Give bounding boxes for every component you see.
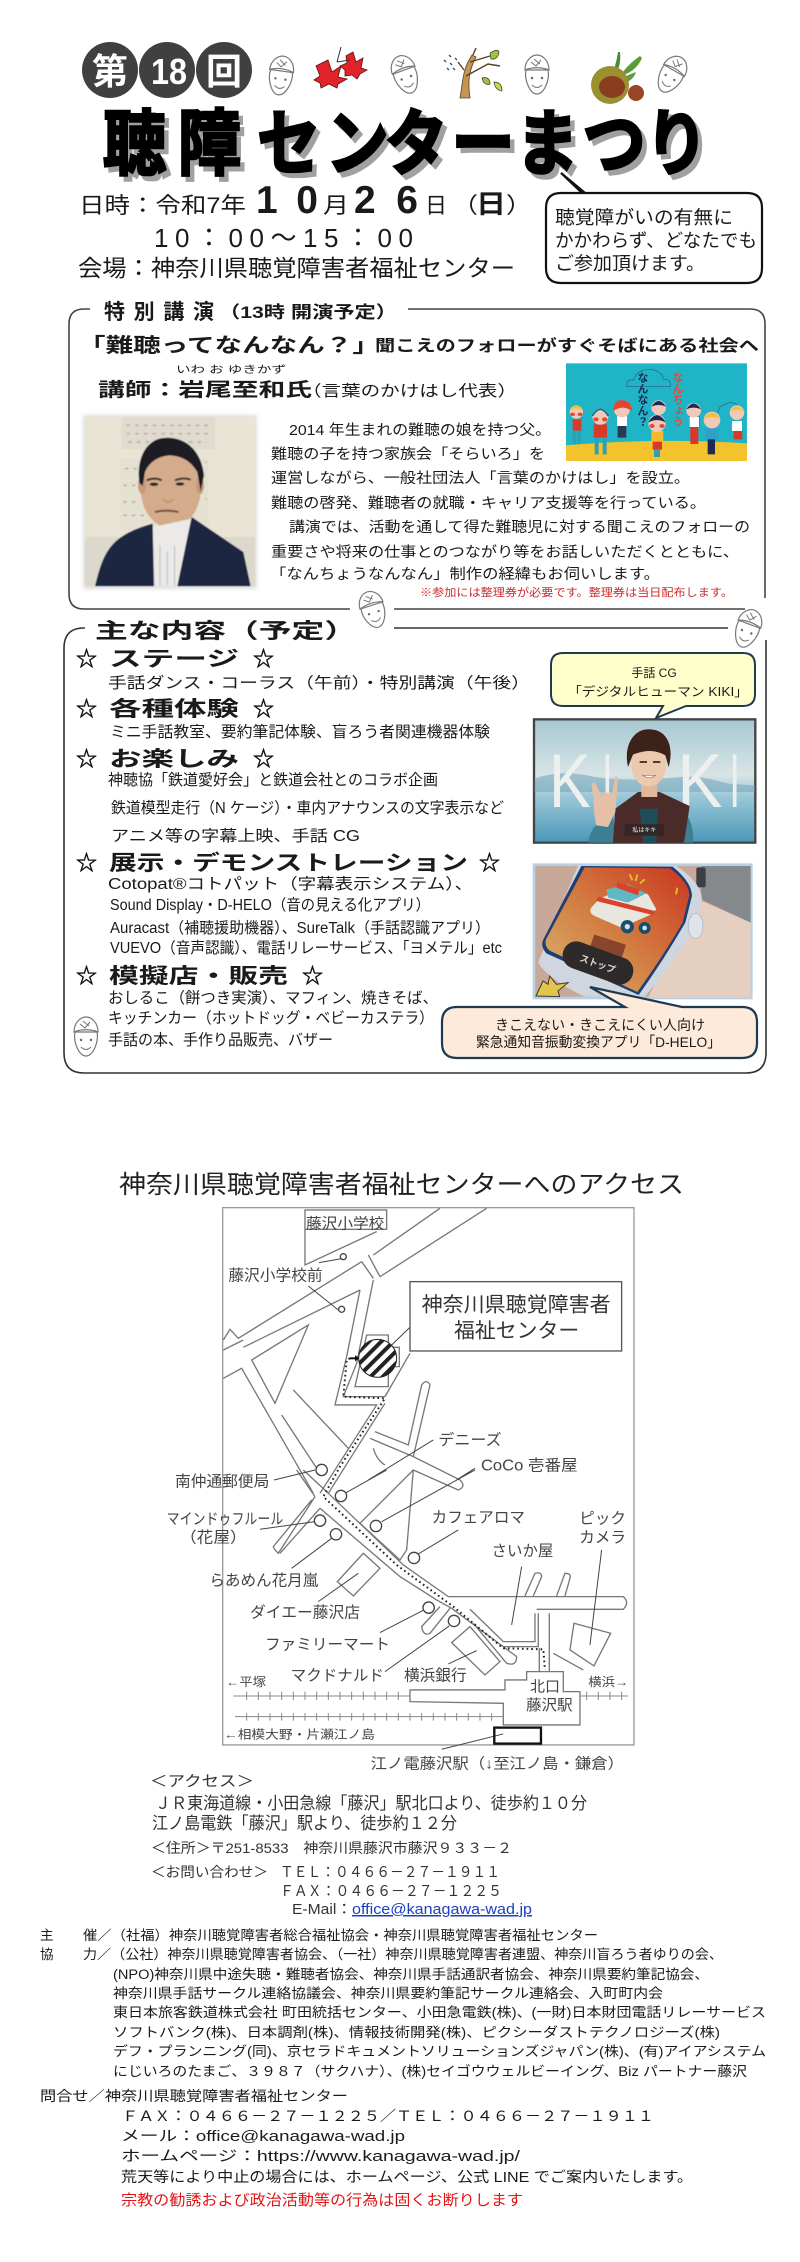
map labels: デニーズ bbox=[438, 1431, 502, 1449]
badge: 第18回: 第 bbox=[92, 51, 128, 92]
organizers and supporters: 神奈川県手話サークル連絡協議会、神奈川県要約筆記サークル連絡会、入町町内会 bbox=[113, 1985, 664, 2001]
label box: center: 神奈川県聴覚障害者 bbox=[422, 1294, 611, 1317]
icon: acorn face 3 bbox=[525, 55, 549, 94]
lecture description: 「なんちょうなんなん」制作の経緯もお伺いします。 bbox=[270, 566, 660, 583]
access information: ＴＥＬ：０４６６－２７－１９１１ bbox=[280, 1864, 500, 1881]
map labels: ファミリーマート bbox=[265, 1636, 390, 1653]
badge: 第18回 bbox=[82, 42, 252, 98]
section: food stalls and sales: 手話の本、手作り品販売、バザー bbox=[108, 1031, 333, 1049]
map labels: ←相模大野・片瀬江ノ島 bbox=[224, 1727, 375, 1742]
event date and venue: 26 bbox=[354, 179, 418, 222]
map labels: 横浜→ bbox=[588, 1675, 628, 1689]
contact information: ＦＡＸ：０４６６－２７－１２２５／ＴＥＬ：０４６６－２７－１９１１ bbox=[122, 2108, 654, 2125]
organizers and supporters: 催／（社福）神奈川聴覚障害者総合福祉協会・神奈川県聴覚障害者福祉センター bbox=[83, 1928, 598, 1943]
contact information: ホームページ：https://www.kanagawa-wad.jp/ bbox=[121, 2149, 521, 2165]
event date and venue: 会場：神奈川県聴覚障害者福祉センター bbox=[78, 255, 515, 281]
event date and venue bbox=[78, 179, 532, 281]
section: fun activities: ☆ bbox=[76, 748, 97, 771]
map labels: マインドゥフルール bbox=[167, 1511, 283, 1528]
icon: acorn face at panel corner bbox=[730, 606, 766, 651]
callout: sign language CG: 「デジタルヒューマン KIKI」 bbox=[568, 684, 748, 699]
section: exhibits and demonstrations: Sound Display・D-HELO（音の見える化アプリ） bbox=[110, 896, 430, 914]
map labels: （花屋） bbox=[180, 1530, 247, 1547]
heading: access: 神奈川県聴覚障害者福祉センターへのアクセス bbox=[119, 1171, 684, 1199]
access information: ＦＡＸ：０４６６－２７－１２２５ bbox=[280, 1883, 502, 1900]
organizers and supporters: 協 bbox=[40, 1947, 54, 1962]
map labels: 藤沢小学校 bbox=[306, 1215, 384, 1232]
organizers and supporters: デフ・プランニング(同)、京セラドキュメントソリューションズジャパン(株)、(有)アイアシステム bbox=[113, 2043, 766, 2059]
label box: center bbox=[410, 1282, 622, 1351]
map labels: 横浜銀行 bbox=[404, 1668, 467, 1685]
notice: no religious or political activity: 宗教の勧誘および政治活動等の行為は固くお断りします bbox=[121, 2191, 523, 2209]
section: food stalls and sales bbox=[76, 965, 438, 1049]
photo: lecturer portrait bbox=[83, 415, 257, 589]
lecture description: 難聴の子を持つ家族会「そらいろ」を bbox=[271, 446, 545, 463]
notice: ticket required: ※参加には整理券が必要です。整理券は当日配布します。 bbox=[420, 585, 733, 599]
event date and venue: （ bbox=[452, 193, 478, 218]
map buildings bbox=[305, 1210, 611, 1725]
lecture time: （13時 開演予定） bbox=[219, 303, 397, 322]
organizers and supporters: にじいろのたまご、３９８７（サクハナ）、(株)セイゴウウェルビーイング、Biz パートナー藤沢 bbox=[113, 2063, 748, 2079]
organizers and supporters: ソフトバンク(株)、日本調剤(株)、情報技術開発(株)、ピクシーダストテクノロジーズ(株) bbox=[113, 2025, 720, 2040]
section: exhibits and demonstrations: VUEVO（音声認識）、電話リレーサービス、「ヨメテル」etc bbox=[110, 939, 502, 957]
access information: 江ノ島電鉄「藤沢」駅より、徒歩約１２分 bbox=[152, 1814, 457, 1833]
section: food stalls and sales: ☆ bbox=[302, 965, 323, 988]
section: exhibits and demonstrations: Auracast（補聴援助機器）、SureTalk（手話認識アプリ） bbox=[110, 919, 490, 937]
image: digital human KIKI bbox=[534, 719, 755, 843]
callout: everyone welcome: 聴覚障がいの有無に bbox=[555, 207, 733, 228]
heading: main contents: 主な内容（予定） bbox=[95, 620, 357, 643]
organizers and supporters bbox=[40, 1928, 766, 2079]
panel border bbox=[64, 628, 766, 1073]
callout: sign language CG: 手話 CG bbox=[631, 666, 677, 680]
badge: 第18回: 18 bbox=[151, 51, 187, 92]
map labels: 江ノ電藤沢駅（↓至江ノ島・鎌倉） bbox=[371, 1755, 624, 1772]
section: exhibits and demonstrations: 展示・デモンストレーション bbox=[109, 851, 468, 875]
section: exhibits and demonstrations: ☆ bbox=[479, 852, 500, 875]
lecture description: 2014 年生まれの難聴の娘を持つ父。 bbox=[289, 422, 551, 439]
map labels: カメラ bbox=[579, 1530, 626, 1547]
map labels: 北口 bbox=[530, 1679, 560, 1696]
event date and venue: 日 bbox=[476, 189, 506, 219]
ruby reading: いわ お ゆきかず bbox=[176, 364, 286, 376]
lecture title: 「難聴ってなんなん？」 bbox=[78, 334, 380, 357]
section: food stalls and sales: 模擬店・販売 bbox=[109, 965, 288, 988]
image: D-HELO watch app bbox=[534, 865, 751, 998]
map labels: 南仲通郵便局 bbox=[175, 1474, 269, 1491]
event date and venue: ） bbox=[506, 193, 532, 218]
section: hands-on experience: ☆ bbox=[253, 698, 274, 721]
section: exhibits and demonstrations bbox=[76, 851, 502, 957]
organizers and supporters: 東日本旅客鉄道株式会社 町田統括センター、小田急電鉄(株)、(一財)日本財団電話リレーサービス bbox=[113, 2004, 766, 2020]
access information: office@kanagawa-wad.jp bbox=[352, 1901, 532, 1918]
section: fun activities bbox=[76, 748, 504, 845]
map labels: 藤沢小学校前 bbox=[228, 1268, 323, 1285]
section: hands-on experience: 各種体験 bbox=[109, 697, 239, 721]
icon: autumn tree bbox=[444, 48, 502, 98]
callout: everyone welcome: かかわらず、どなたでも bbox=[555, 230, 757, 251]
rail tracks bbox=[233, 1692, 628, 1721]
section: exhibits and demonstrations: Cotopat®コトパット（字幕表示システム）、 bbox=[108, 875, 473, 893]
title: 聴障センターまつり bbox=[103, 105, 708, 185]
section: hands-on experience: ☆ bbox=[76, 698, 97, 721]
organizers and supporters: 主 bbox=[40, 1928, 54, 1943]
section: hands-on experience: ミニ手話教室、要約筆記体験、盲ろう者関連機器体験 bbox=[110, 723, 490, 741]
access information: ＪＲ東海道線・小田急線「藤沢」駅北口より、徒歩約１０分 bbox=[155, 1794, 587, 1813]
section: fun activities: 神聴協「鉄道愛好会」と鉄道会社とのコラボ企画 bbox=[108, 771, 438, 789]
map labels: 藤沢駅 bbox=[526, 1697, 573, 1714]
lecture description bbox=[270, 422, 750, 583]
image: digital human KIKI: 私はキキ bbox=[632, 826, 656, 834]
image: digital human KIKI: I bbox=[602, 739, 613, 824]
callout: D-HELO app: きこえない・きこえにくい人向け bbox=[495, 1017, 705, 1033]
panel: special lecture bbox=[69, 301, 765, 609]
map labels: らあめん花月嵐 bbox=[209, 1573, 319, 1590]
icon: acorn face between panels bbox=[356, 588, 390, 631]
contact information: 荒天等により中止の場合には、ホームページ、公式 LINE でご案内いたします。 bbox=[121, 2168, 693, 2186]
section: fun activities: ☆ bbox=[253, 748, 274, 771]
section: food stalls and sales: おしるこ（餅つき実演）、マフィン、焼きそば、 bbox=[108, 989, 438, 1007]
access information: E-Mail： bbox=[292, 1901, 352, 1918]
heading: special lecture: 特別講演 bbox=[104, 301, 214, 324]
leader lines and markers bbox=[260, 1254, 602, 1749]
map labels: さいか屋 bbox=[492, 1543, 553, 1560]
section: fun activities: 鉄道模型走行（N ケージ）・車内アナウンスの文字表示など bbox=[111, 799, 504, 817]
icon: chestnut with leaves bbox=[591, 52, 644, 104]
event date and venue: 10 bbox=[256, 179, 318, 222]
illustration: children running: なんちょう bbox=[671, 372, 683, 427]
map frame bbox=[223, 1208, 634, 1745]
image: digital human KIKI: K bbox=[677, 739, 722, 824]
icon: acorn face 1 bbox=[266, 55, 296, 96]
access information: ＜アクセス＞ bbox=[150, 1773, 254, 1790]
map labels: ←平塚 bbox=[226, 1675, 266, 1689]
map labels: マクドナルド bbox=[291, 1668, 384, 1685]
callout: sign language CG bbox=[551, 653, 755, 718]
marker: center location bbox=[359, 1339, 397, 1377]
section: stage: 手話ダンス・コーラス（午前）・特別講演（午後） bbox=[108, 674, 530, 692]
section: fun activities: アニメ等の字幕上映、手話 CG bbox=[111, 827, 360, 845]
map labels: ピック bbox=[579, 1510, 626, 1527]
map labels bbox=[167, 1215, 628, 1772]
walking route bbox=[323, 1358, 545, 1670]
callout: everyone welcome bbox=[546, 173, 762, 283]
image: D-HELO watch app: ストップ bbox=[578, 953, 617, 976]
event date and venue: 日時：令和7年 bbox=[79, 193, 246, 218]
illustration: children running bbox=[566, 363, 747, 461]
event date and venue: 月 bbox=[323, 193, 349, 218]
section: stage: ☆ bbox=[76, 648, 97, 671]
event date and venue: 日 bbox=[425, 193, 447, 218]
callout: D-HELO app: 緊急通知音振動変換アプリ「D-HELO」 bbox=[476, 1034, 721, 1050]
title: 聴障センターまつり bbox=[107, 110, 713, 190]
contact information: 問合せ／神奈川県聴覚障害者福祉センター bbox=[40, 2088, 348, 2104]
access information bbox=[150, 1773, 587, 1918]
badge: 第18回: 回 bbox=[206, 51, 242, 92]
contact information bbox=[40, 2088, 693, 2186]
access information: ＜住所＞〒251-8533 神奈川県藤沢市藤沢９３３－２ bbox=[151, 1840, 512, 1856]
section: food stalls and sales: キッチンカー（ホットドッグ・ベビーカステラ） bbox=[108, 1009, 434, 1027]
callout: everyone welcome: ご参加頂けます。 bbox=[555, 253, 705, 274]
icon: acorn face 4 bbox=[652, 52, 692, 97]
organizers and supporters: 力／（公社）神奈川県聴覚障害者協会、（一社）神奈川県聴覚障害者連盟、神奈川盲ろう者ゆりの会、 bbox=[83, 1947, 723, 1962]
panel border bbox=[69, 309, 765, 609]
image: digital human KIKI: I bbox=[729, 739, 740, 824]
map labels: ダイエー藤沢店 bbox=[250, 1605, 360, 1622]
organizers and supporters: (NPO)神奈川県中途失聴・難聴者協会、神奈川県手話通訳者協会、神奈川県要約筆記協会、 bbox=[113, 1967, 709, 1982]
label box: center: 福祉センター bbox=[454, 1319, 579, 1342]
panel: main contents bbox=[64, 620, 766, 1073]
contact information: メール：office@kanagawa-wad.jp bbox=[121, 2129, 405, 2145]
section: food stalls and sales: ☆ bbox=[76, 965, 97, 988]
image: digital human KIKI: K bbox=[549, 739, 591, 824]
section: stage bbox=[76, 648, 530, 692]
section: hands-on experience bbox=[76, 697, 490, 741]
lecturer name: 講師：岩尾至和氏 bbox=[98, 379, 312, 401]
callout: D-HELO app bbox=[442, 987, 757, 1058]
event date and venue: 10：00～15：00 bbox=[154, 223, 413, 253]
map labels: CoCo 壱番屋 bbox=[481, 1458, 578, 1475]
lecture description: 重要さや将来の仕事とのつながり等をお話しいただくとともに、 bbox=[271, 543, 739, 561]
icon: acorn face 2 bbox=[387, 52, 423, 97]
icon: acorn face in panel bbox=[74, 1017, 98, 1056]
lecture description: 講演では、活動を通して得た難聴児に対する聞こえのフォローの bbox=[289, 519, 750, 536]
Enoden station box bbox=[494, 1728, 541, 1744]
lecture subtitle: 聞こえのフォローがすぐそばにある社会へ bbox=[375, 336, 759, 355]
section: fun activities: お楽しみ bbox=[109, 748, 239, 771]
lecture description: 難聴の啓発、難聴者の就職・キャリア支援等を行っている。 bbox=[271, 494, 706, 512]
icon: maple leaves bbox=[314, 47, 367, 88]
section: exhibits and demonstrations: ☆ bbox=[76, 852, 97, 875]
lecture description: 運営しながら、一般社団法人「言葉のかけはし」を設立。 bbox=[271, 470, 690, 487]
section: stage: ステージ bbox=[109, 648, 239, 671]
map labels: カフェアロマ bbox=[432, 1510, 525, 1527]
lecturer affiliation: （言葉のかけはし代表） bbox=[302, 382, 517, 400]
map roads bbox=[223, 1208, 627, 1672]
map: access map bbox=[167, 1208, 634, 1772]
access information: ＜お問い合わせ＞ bbox=[151, 1864, 268, 1880]
section: stage: ☆ bbox=[253, 648, 274, 671]
illustration: children running: なんなん？ bbox=[636, 372, 648, 427]
